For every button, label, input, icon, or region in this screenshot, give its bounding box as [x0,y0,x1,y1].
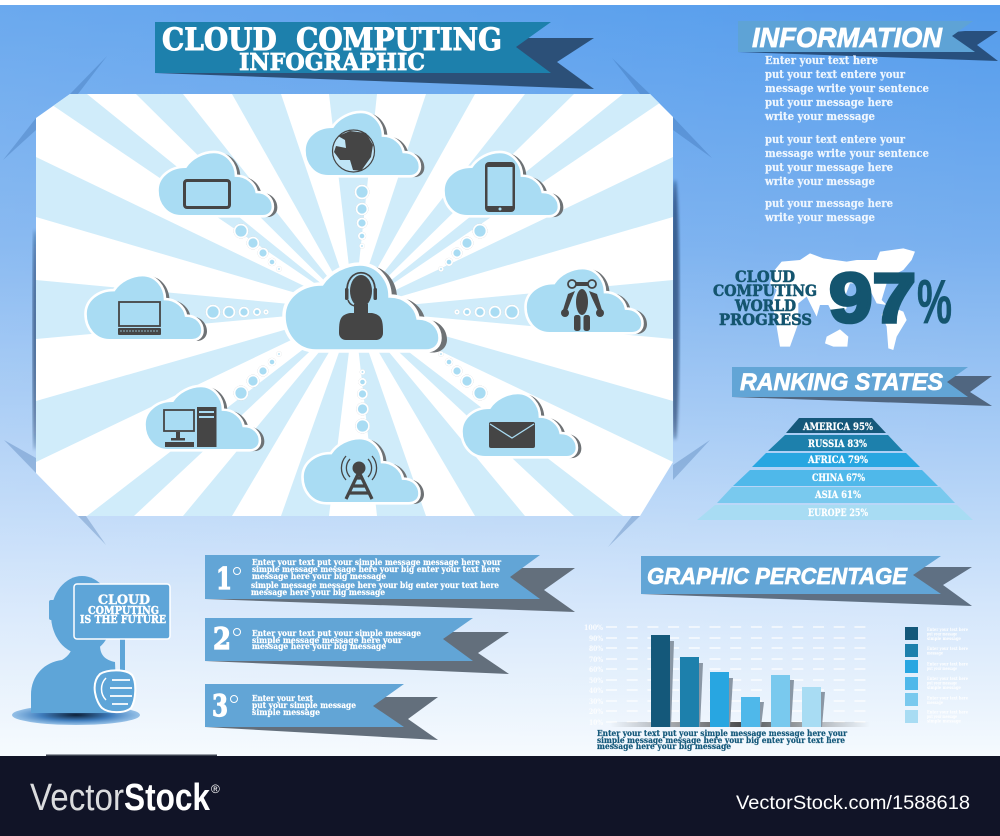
ranking pyramid: CHINA 67% [812,473,865,484]
ribbon: step 1: message here your big message [251,587,385,597]
stat label: PROGRESS [719,310,812,329]
ranking ribbon [732,367,992,406]
stat label: COMPUTING [713,281,817,300]
footer bar [0,756,1000,836]
information text block: put your text entere your [765,132,906,146]
axis labels: 50% [589,676,603,685]
ranking ribbon: RANKING STATES [740,369,943,396]
graphic percentage ribbon [641,556,972,606]
title ribbon [155,22,594,89]
ribbon: step 3: 3 [212,689,228,724]
axis labels: 20% [589,707,603,716]
sign text: COMPUTING [88,604,159,617]
cloud: central support agent [284,264,447,352]
axis labels: 80% [589,644,603,653]
information ribbon: INFORMATION [752,22,943,53]
information text block: message write your sentence [765,146,929,160]
information text block: write your message [764,109,875,123]
icon: globe [332,130,374,172]
information text block: Enter your text here [765,53,878,67]
axis labels: 10% [589,718,603,727]
chart legend: put your message [927,680,957,686]
sign [74,584,170,639]
information text block: put your message here [765,160,893,174]
axis labels: 60% [589,665,603,674]
connector bubbles [206,186,518,432]
chart legend: put your message [927,714,957,720]
ribbon: step 1: simple message message here your big enter your text here [251,580,499,590]
axis labels: 70% [589,655,603,664]
chart legend: message [927,701,943,706]
ribbon: step 1: simple message message here your big enter your text here [252,564,500,574]
logo: Vector [30,777,124,819]
information ribbon [738,21,998,61]
ribbon: step 3: Enter your text [252,693,313,703]
axis labels: 30% [589,697,603,706]
stat label: WORLD [734,296,796,315]
cloud: globe [304,112,424,177]
cloud: tablet [157,152,277,217]
ranking pyramid: EUROPE 25% [808,508,868,519]
sign text: CLOUD [98,593,150,608]
ranking pyramid: RUSSIA 83% [808,439,867,450]
chart legend: Enter your text here [927,662,968,668]
icon: fist [95,670,135,712]
chart legend: put your message [927,632,957,638]
logo [30,777,220,819]
information text block: message write your sentence [765,81,929,95]
chart caption: simple message message here your big enter your text here [597,735,845,745]
ribbon: step 2: 2 [213,622,231,657]
chart legend: simple message [927,718,961,724]
ribbon: step 3: simple message [252,707,320,717]
cloud: antenna [302,438,424,504]
chart legend: put your message [927,666,957,672]
axis labels: 100% [584,623,603,632]
information text block [764,53,929,224]
subtitle text: INFOGRAPHIC [239,49,425,76]
title text: CLOUD COMPUTING [162,22,502,58]
bars [651,635,821,727]
ribbon: step 3: put your simple message [252,700,356,710]
ranking pyramid: AMERICA 95% [802,422,873,433]
information text block: write your message [764,174,875,188]
ribbon: step 1: 1 [216,562,232,597]
icon: robot [561,280,604,331]
ribbon: step 2: simple message message here your [252,635,403,645]
ribbon: step 1: Enter your text put your simple message message here your [252,557,502,567]
ribbon: step 1 [205,555,575,612]
stat label: CLOUD [735,267,795,286]
sign text [80,593,166,626]
ranking pyramid: AFRICA 79% [807,455,868,466]
icon: desktop computer [164,407,216,447]
ribbon: step 2 [205,618,509,674]
information text block: write your message [764,210,875,224]
axis labels: 40% [589,686,603,695]
cloud: desktop computer [144,386,264,451]
icon: tablet [184,180,230,208]
ranking pyramid [697,418,973,520]
chart legend: Enter your text here [927,710,968,716]
information text block: put your text entere your [765,67,906,81]
icon: smartphone [485,162,515,212]
cloud: laptop [86,275,207,341]
stat percent: % [917,268,952,337]
ribbon: step 1: message here your big message [252,571,386,581]
chart caption: Enter your text put your simple message message here your [597,728,848,738]
axis labels: 90% [589,634,603,643]
person silhouette [31,576,125,713]
chart legend [905,627,968,724]
cloud: robot [526,268,647,334]
image id: VectorStock.com/1588618 [736,792,970,814]
ribbon: step 2: message here your big message [252,641,386,651]
chart legend: Enter your text here [927,696,968,702]
chart legend: simple message [927,685,961,691]
cloud: mail [461,393,581,458]
axis labels [584,623,603,727]
world progress stat [713,248,952,350]
chart legend: Enter your text here [927,676,968,682]
figure holding sign [12,576,170,725]
icon: headset agent [339,273,383,340]
sign text: IS THE FUTURE [80,613,166,626]
ground shadow [12,705,140,725]
icon: envelope [489,422,535,448]
chart caption [597,728,848,751]
chart legend: Enter your text here [927,627,968,633]
information text block: put your message here [765,95,893,109]
logo: Stock [124,777,211,819]
logo: ® [211,782,220,796]
ranking pyramid: ASIA 61% [814,490,861,501]
stat label [713,267,817,329]
chart legend: message [927,652,943,656]
cloud: phone [443,152,563,217]
chart caption: message here your big message [597,741,731,751]
panel: cloud network [36,94,673,516]
icon: laptop [118,302,161,335]
icon: antenna tower [341,456,377,499]
information text block: put your message here [765,196,893,210]
chart legend: Enter your text here [927,646,968,652]
graphic percentage ribbon: GRAPHIC PERCENTAGE [647,563,908,589]
ribbon: step 2: Enter your text put your simple message [252,628,421,638]
bar chart [584,623,870,727]
world map [770,248,915,350]
stat number: 97 [829,259,916,337]
chart legend: simple message [927,636,961,642]
ribbon: step 3 [205,684,438,740]
